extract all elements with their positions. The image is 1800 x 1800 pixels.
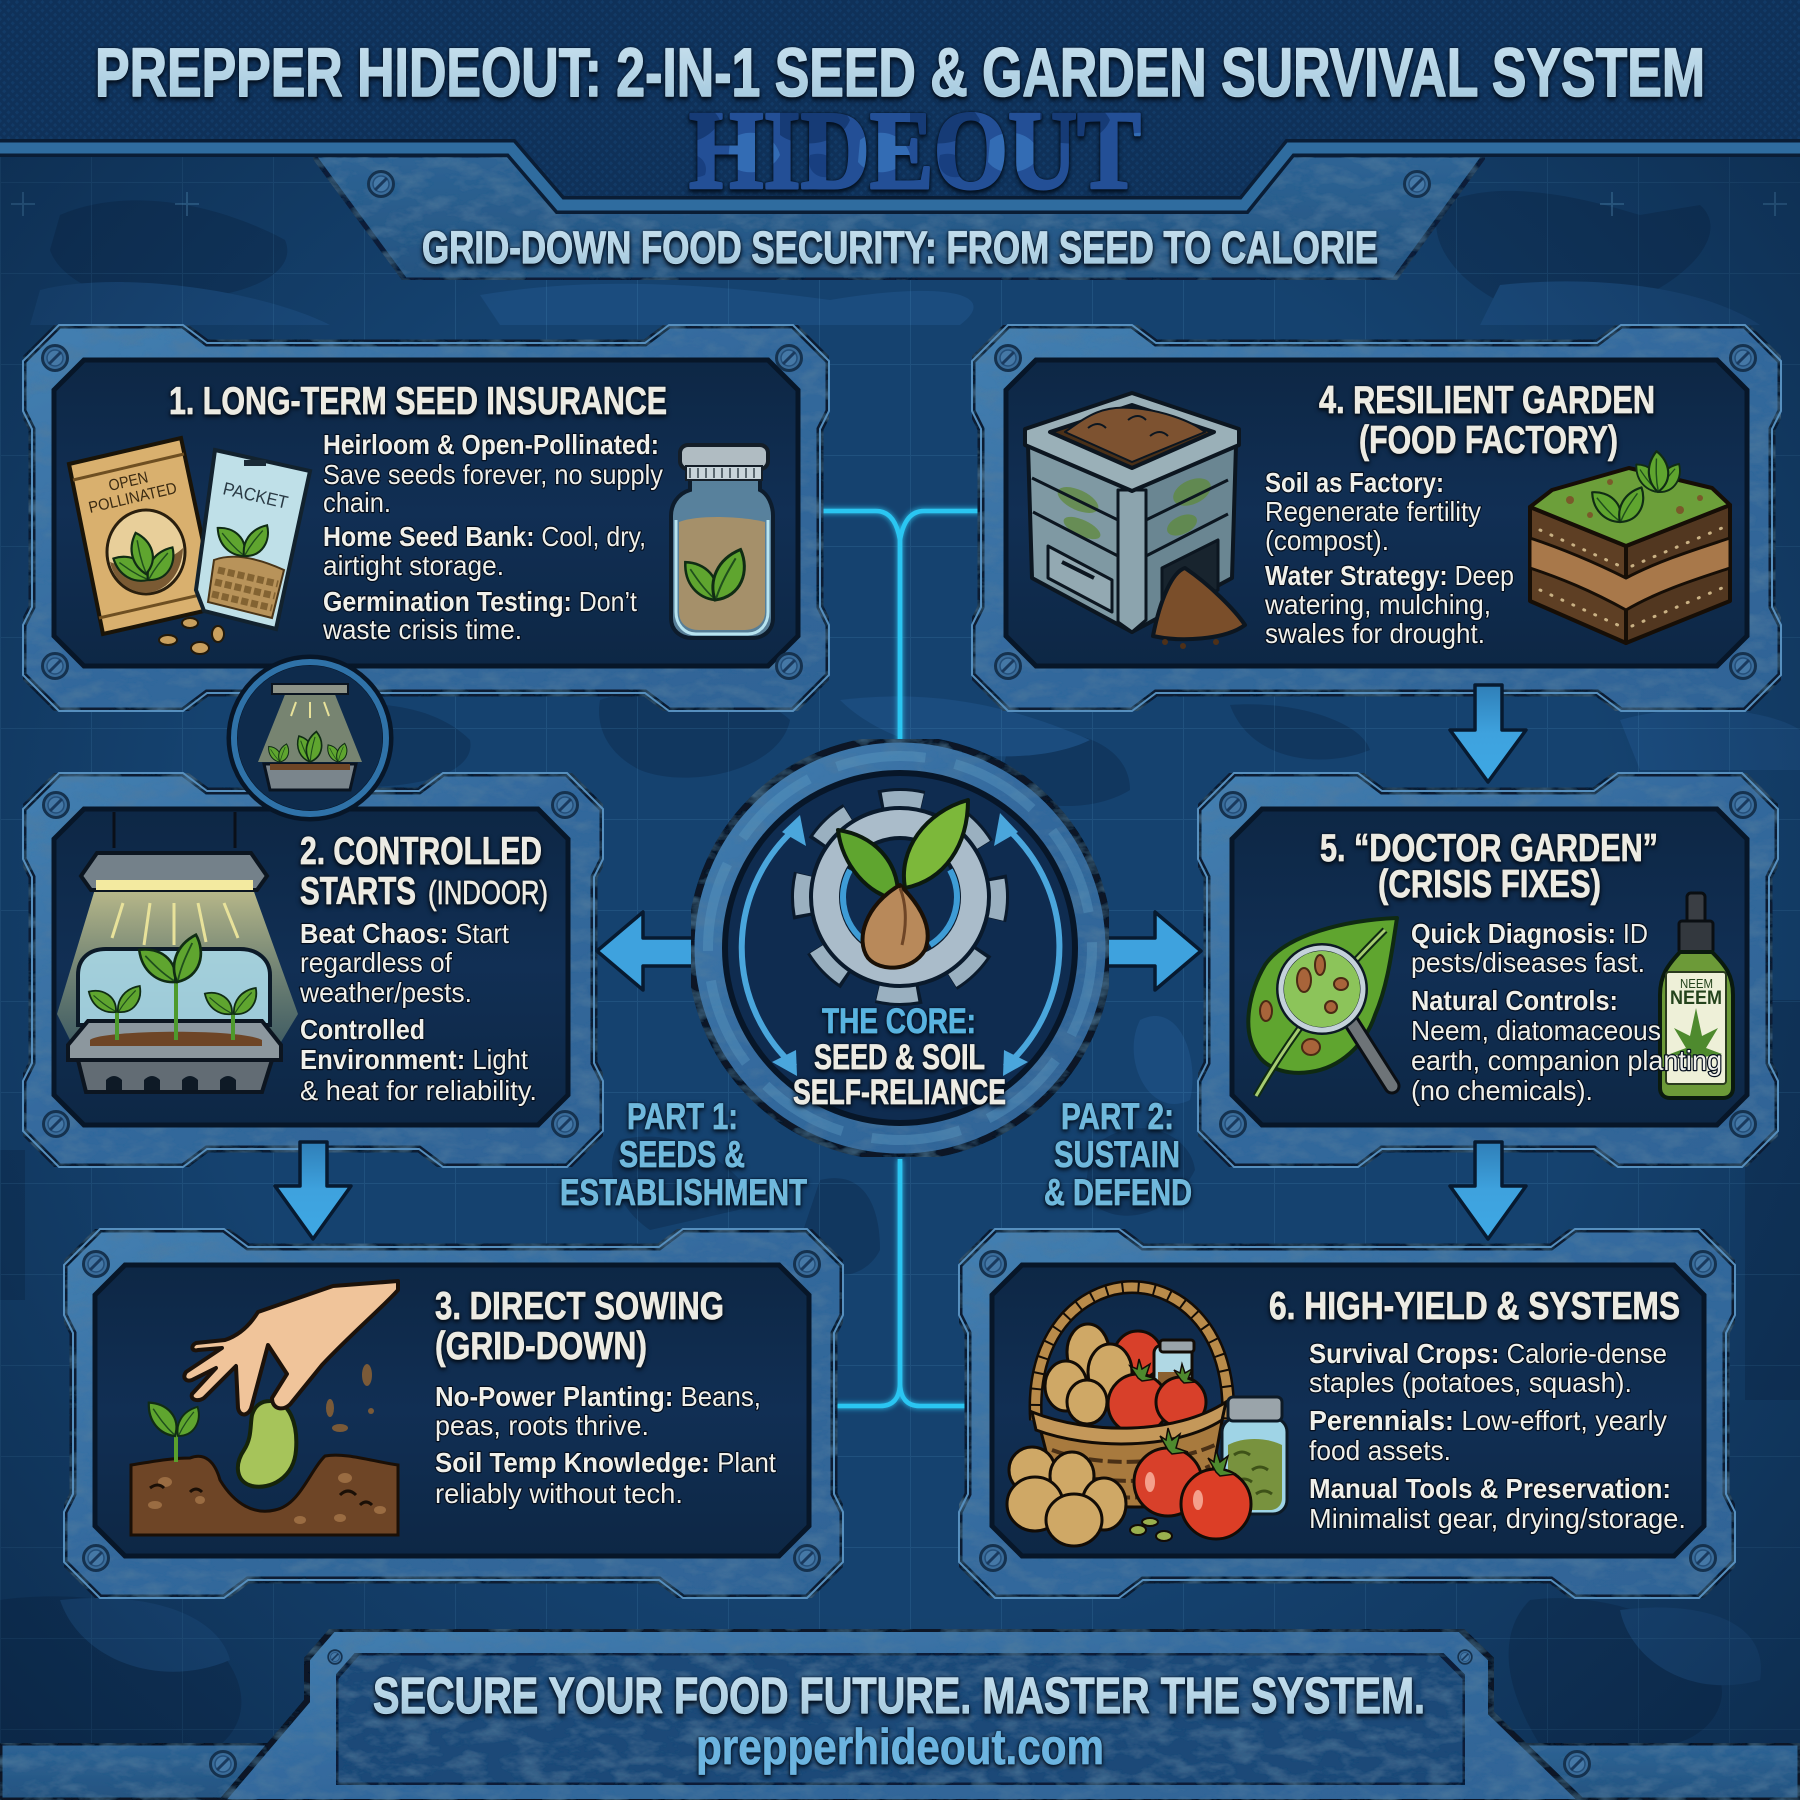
subtitle: GRID-DOWN FOOD SECURITY: FROM SEED TO CALORIE [422, 222, 1378, 273]
body text: Controlled [300, 1014, 425, 1045]
hideout camo logo: HIDEOUT [689, 89, 1141, 213]
footer inner [336, 1653, 1465, 1785]
panel 3: direct sowing [64, 1229, 843, 1598]
body text [1411, 918, 1722, 1106]
icon: bean [238, 1401, 296, 1487]
icon: tomatoes [1134, 1428, 1251, 1539]
icon: clear seed packet [196, 450, 310, 629]
arrow: core to panel 2 [597, 912, 705, 990]
body text: Minimalist gear, drying/storage. [1309, 1503, 1686, 1534]
body text: swales for drought. [1265, 618, 1485, 649]
body text: earth, companion planting [1411, 1045, 1722, 1076]
panel 6: high-yield and systems [959, 1229, 1735, 1598]
inner panel [992, 1265, 1704, 1556]
icon: soil cube [1530, 451, 1730, 643]
body text: watering, mulching, [1264, 589, 1491, 620]
icon: open pollinated seed packet: OPEN [107, 469, 150, 495]
body text: Perennials: Low-effort, yearly [1309, 1405, 1667, 1436]
sprout and seed [838, 800, 968, 968]
icon: hand [184, 1281, 398, 1414]
icon: neem bottle [1660, 893, 1733, 1098]
label: part 2: PART 2: [1061, 1096, 1174, 1137]
heading: 6. HIGH-YIELD & SYSTEMS [1269, 1285, 1680, 1328]
inner disc [725, 773, 1075, 1123]
core text: THE CORE: [822, 1002, 976, 1041]
heading: (GRID-DOWN) [435, 1325, 647, 1368]
body text: reliably without tech. [435, 1478, 683, 1509]
panel 2: controlled starts [23, 773, 603, 1167]
header strap [0, 148, 1800, 205]
arrow: panel 5 to panel 6 [1450, 1142, 1526, 1239]
core text [793, 1002, 1006, 1112]
footer banner [0, 1629, 1800, 1800]
heading [435, 1285, 724, 1368]
icon: neem bottle: NEEM [1680, 976, 1713, 991]
label: part 1: PART 1: [627, 1096, 738, 1137]
inner panel [95, 1265, 809, 1556]
body text [435, 1381, 776, 1509]
heading: STARTS [300, 870, 416, 913]
body text: Natural Controls: [1411, 985, 1618, 1016]
arrow: panel 2 to panel 3 [275, 1142, 351, 1239]
body text: food assets. [1309, 1435, 1451, 1466]
label: part 2: & DEFEND [1044, 1172, 1192, 1213]
label: part 2: SUSTAIN [1054, 1134, 1180, 1175]
body text: Soil Temp Knowledge: Plant [435, 1447, 776, 1478]
heading: 4. RESILIENT GARDEN [1319, 379, 1655, 422]
icon: soil trench [131, 1455, 398, 1535]
heading: (INDOOR) [428, 874, 548, 911]
heading: 5. “DOCTOR GARDEN” [1320, 827, 1658, 870]
frame [64, 1229, 843, 1598]
icon: neem bottle: NEEM [1670, 988, 1722, 1009]
label: part 1: ESTABLISHMENT [560, 1172, 807, 1213]
frame [1198, 773, 1778, 1167]
body text: Water Strategy: Deep [1265, 560, 1514, 591]
icon: open pollinated seed packet: POLLINATED [87, 480, 179, 517]
gear [787, 784, 1013, 1010]
circular arrows [742, 813, 1059, 1076]
body text: Survival Crops: Calorie-dense [1309, 1338, 1667, 1369]
body text: Heirloom & Open-Pollinated: [323, 429, 659, 460]
icon: seeds [1130, 1518, 1172, 1541]
body text [1309, 1338, 1686, 1534]
inner panel [54, 809, 568, 1125]
body text: peas, roots thrive. [435, 1410, 649, 1441]
body text [1264, 467, 1514, 649]
body text: chain. [323, 487, 391, 518]
body text: Neem, diatomaceous [1411, 1015, 1661, 1046]
body text: Environment: Light [300, 1044, 528, 1075]
inner panel [54, 360, 798, 666]
icon: preserve jar [1222, 1397, 1287, 1514]
frame [972, 325, 1781, 711]
heading [1320, 827, 1658, 906]
inner panel [1006, 360, 1747, 666]
body text: weather/pests. [299, 977, 472, 1008]
heading: (FOOD FACTORY) [1359, 419, 1618, 462]
footer straps [0, 1743, 1800, 1800]
icon: soil crumbs [326, 1364, 374, 1432]
footer plate [221, 1629, 1583, 1800]
body text: Germination Testing: Don’t [323, 586, 637, 617]
label: part 1: SEEDS & [619, 1134, 745, 1175]
icon: loose seeds [159, 618, 224, 654]
heading: 1. LONG-TERM SEED INSURANCE [169, 380, 667, 423]
frame [23, 773, 603, 1167]
body text: pests/diseases fast. [1411, 947, 1645, 978]
icon: compost bin [1025, 393, 1245, 649]
arrow: panel 4 to panel 5 [1450, 685, 1526, 782]
footer url: prepperhideout.com [696, 1719, 1104, 1775]
icon: clear seed packet: PACKET [221, 478, 290, 513]
icon: grow lamp and seedling tray [57, 812, 298, 1092]
body text: Save seeds forever, no supply [323, 459, 663, 490]
label: part 2 [1044, 1096, 1192, 1213]
heading: 3. DIRECT SOWING [435, 1285, 724, 1328]
body text: regardless of [300, 947, 452, 978]
icon: open pollinated seed packet [69, 438, 217, 634]
central core badge [691, 739, 1109, 1157]
footer tagline: SECURE YOUR FOOD FUTURE. MASTER THE SYSTEM. [373, 1667, 1425, 1724]
label: part 1 [560, 1096, 807, 1213]
panel 4: resilient garden [972, 325, 1781, 711]
panel 5: doctor garden [1198, 773, 1778, 1167]
connector lines [812, 511, 988, 1406]
frame [23, 325, 829, 711]
body text [322, 429, 663, 645]
icon: sprout [144, 1395, 207, 1462]
body text: Home Seed Bank: Cool, dry, [323, 521, 646, 552]
body text: Manual Tools & Preservation: [1309, 1473, 1671, 1504]
body text: Beat Chaos: Start [300, 918, 509, 949]
icon: potatoes [1007, 1447, 1126, 1546]
icon: diseased leaf under magnifier [1248, 918, 1397, 1096]
icon: small grow light badge [232, 660, 388, 816]
body text [299, 918, 537, 1106]
body text: Regenerate fertility [1265, 496, 1481, 527]
outer ring [691, 739, 1109, 1157]
core text: SEED & SOIL [814, 1038, 985, 1077]
header band [0, 0, 1800, 280]
body text: waste crisis time. [322, 614, 522, 645]
heading [300, 830, 548, 913]
icon: seed jar [671, 445, 773, 638]
body text: Soil as Factory: [1265, 467, 1444, 498]
body text: (no chemicals). [1411, 1075, 1593, 1106]
icon: harvest basket [1032, 1287, 1228, 1507]
heading [1319, 379, 1655, 462]
panel 1: long-term seed insurance [23, 325, 829, 711]
heading: (CRISIS FIXES) [1378, 863, 1601, 906]
core text: SELF-RELIANCE [793, 1073, 1006, 1112]
body text: airtight storage. [323, 550, 504, 581]
body text: (compost). [1265, 525, 1389, 556]
heading: 2. CONTROLLED [300, 830, 542, 873]
body text: & heat for reliability. [300, 1075, 537, 1106]
body text: staples (potatoes, squash). [1309, 1367, 1632, 1398]
body text: Quick Diagnosis: ID [1411, 918, 1648, 949]
inner panel [1232, 809, 1747, 1125]
subtitle plate [313, 155, 1485, 280]
frame [959, 1229, 1735, 1598]
body text: No-Power Planting: Beans, [435, 1381, 761, 1412]
arrow: core to panel 5 [1095, 912, 1201, 990]
